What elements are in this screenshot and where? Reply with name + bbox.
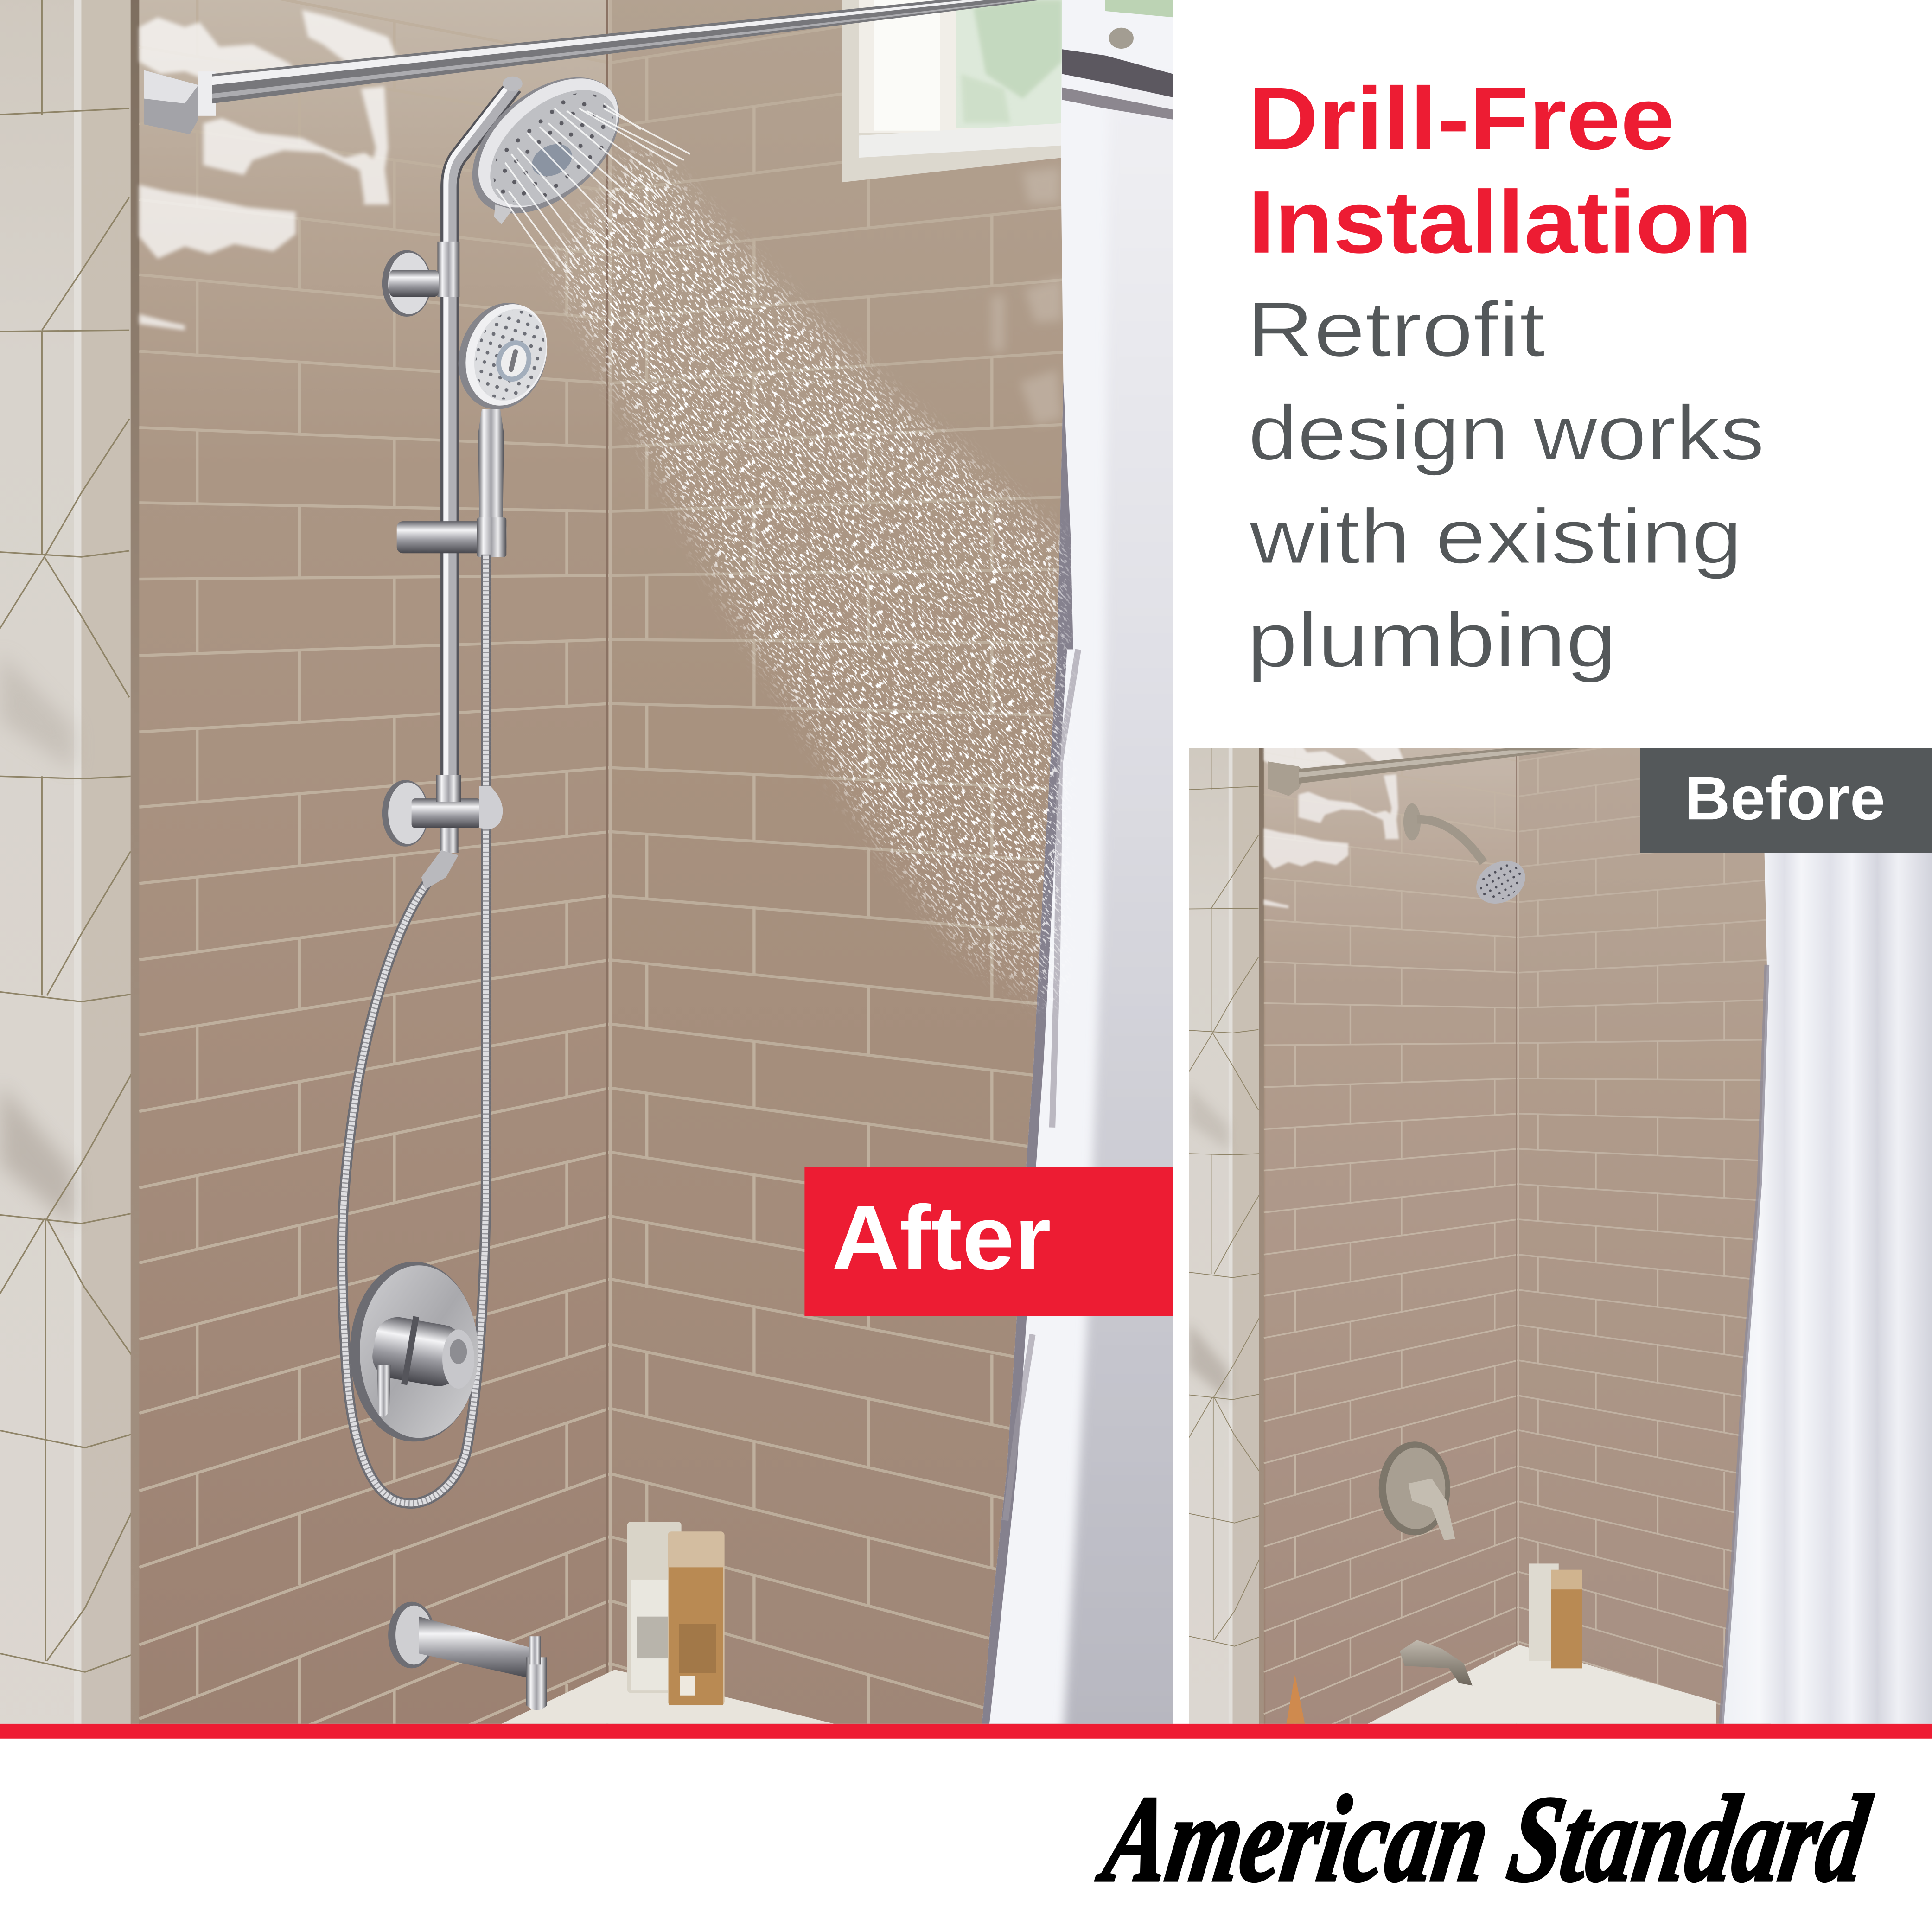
lighter wall tint (1265, 748, 1771, 1724)
orange pouch (1286, 1675, 1305, 1724)
rain shower head (446, 50, 645, 241)
flexible hose (342, 555, 486, 1504)
tub spout (388, 1602, 547, 1710)
curtain edge band (1722, 965, 1767, 1724)
red divider bar (0, 1724, 1932, 1739)
label: Before (1640, 748, 1932, 853)
heading (1248, 69, 1752, 272)
tub spout (1400, 1640, 1473, 1685)
heading: Installation (1248, 172, 1752, 272)
description text: plumbing (1247, 597, 1617, 683)
shower curtain rod (144, 0, 1041, 134)
hand shower handle (478, 409, 504, 523)
water spray (0, 0, 1641, 1416)
description text: design works (1248, 389, 1765, 476)
bottles (627, 1522, 725, 1705)
label: Before: Before (1684, 764, 1885, 833)
water streaks from nozzles (497, 103, 690, 277)
shower curtain (982, 0, 1201, 1756)
shower curtain (1722, 853, 1932, 1724)
rail collar (437, 242, 459, 297)
hand shower head (445, 291, 561, 421)
label: After: After (832, 1186, 1051, 1288)
tiled shower walls (0, 0, 1078, 1724)
shower arm and head (1403, 803, 1533, 912)
valve trim (1379, 1441, 1455, 1540)
panel: before photo (1189, 711, 1932, 1797)
tub (502, 1670, 834, 1724)
tiled shower walls (1189, 711, 1771, 1797)
wall mount bracket (382, 250, 439, 317)
heading: Drill-Free (1248, 69, 1675, 168)
window (842, 0, 1062, 182)
panel: after photo (0, 0, 1173, 1724)
tub (1368, 1645, 1716, 1724)
description text (1247, 286, 1765, 683)
slide clamp (397, 517, 506, 557)
wet tile reflections (992, 167, 1062, 425)
description text: with existing (1249, 493, 1742, 580)
lower bracket (382, 775, 503, 890)
description text: Retrofit (1247, 286, 1545, 373)
bottles (1529, 1563, 1582, 1668)
curtain rod (1268, 748, 1583, 796)
overhead shower rail (446, 86, 514, 789)
label: After (804, 1167, 1173, 1316)
valve trim plate (350, 1262, 478, 1441)
